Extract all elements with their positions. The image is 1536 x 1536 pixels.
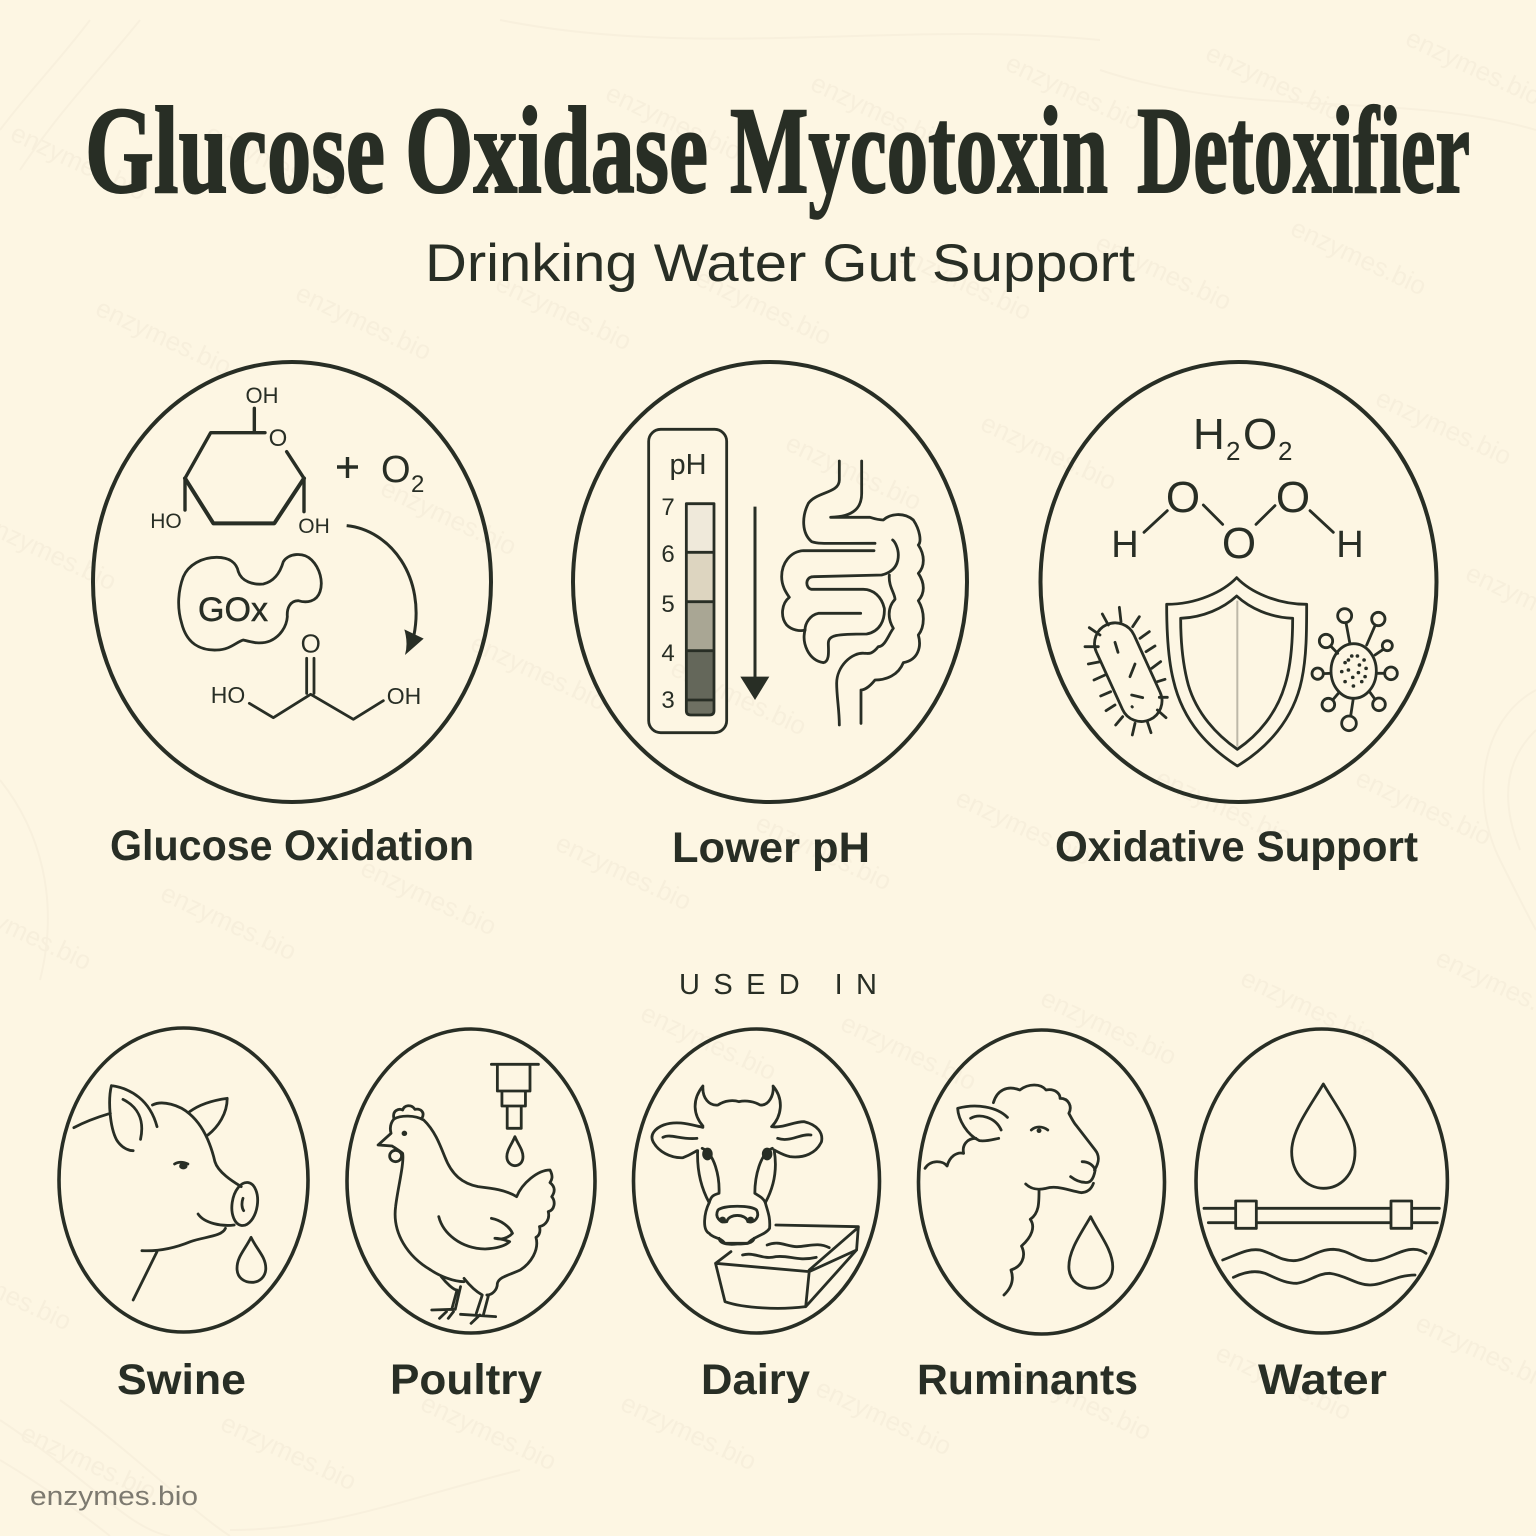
icon: intestines	[782, 461, 923, 725]
text: enzymes.bio	[491, 267, 636, 356]
icon: cow	[652, 1086, 822, 1244]
panel outline: ruminants	[918, 1030, 1164, 1334]
text: enzymes.bio	[1151, 762, 1296, 851]
panel: dairy	[634, 1029, 880, 1333]
text: enzymes.bio	[806, 67, 951, 156]
chart: pH strip: pH	[669, 449, 707, 481]
label: oxidative support: Oxidative Support	[1055, 823, 1418, 871]
icon: hen	[378, 1106, 554, 1323]
chart: pH strip	[649, 429, 727, 733]
panel outline: swine	[59, 1028, 308, 1332]
icon: water drop	[1292, 1084, 1355, 1188]
text: enzymes.bio	[691, 262, 836, 351]
icon: pig	[74, 1086, 266, 1300]
text: enzymes.bio	[466, 627, 611, 716]
label: glucose oxidation: Glucose Oxidation	[110, 822, 474, 870]
label: dairy: Dairy	[701, 1356, 810, 1404]
text: enzymes.bio	[891, 237, 1036, 326]
title	[85, 82, 1470, 219]
arrow: reaction	[347, 526, 424, 655]
diagram: peroxide molecule: O	[1166, 473, 1200, 522]
label: ruminants: Ruminants	[917, 1356, 1138, 1404]
heading: used in: USED IN	[679, 969, 877, 1001]
label: lower pH: Lower pH	[672, 824, 870, 872]
panel: poultry	[347, 1029, 595, 1333]
diagram: dihydroxyacetone	[211, 629, 421, 719]
label: glucose atoms: HO	[150, 510, 182, 533]
panel: oxidative support	[1040, 362, 1436, 802]
chart: pH strip: 3	[661, 687, 675, 714]
label: plus oxygen: 2	[411, 471, 424, 498]
icon: virus	[1312, 609, 1397, 731]
panel: ruminants	[918, 1030, 1164, 1334]
label: glucose atoms: OH	[246, 383, 278, 408]
diagram: peroxide molecule	[1111, 473, 1364, 568]
text: enzymes.bio	[1371, 382, 1516, 471]
panel outline: glucose oxidation	[93, 362, 491, 802]
diagram: peroxide molecule: H	[1336, 524, 1364, 566]
panel: glucose oxidation	[93, 362, 491, 802]
text: enzymes.bio	[201, 117, 346, 206]
chart: pH strip: 5	[661, 591, 675, 618]
text: enzymes.bio	[1286, 212, 1431, 301]
icon: shield	[1167, 578, 1307, 766]
panel outline: poultry	[347, 1029, 595, 1333]
text: enzymes.bio	[1091, 227, 1236, 316]
text: enzymes.bio	[156, 877, 301, 966]
label: glucose atoms: O	[269, 425, 287, 452]
chart: pH strip: 4	[661, 640, 675, 667]
panel: lower pH	[573, 362, 967, 802]
panel outline: lower pH	[573, 362, 967, 802]
text: enzymes.bio	[1201, 37, 1346, 126]
diagram: peroxide molecule: O	[1276, 473, 1310, 522]
formula: H2O2: O	[1243, 410, 1277, 459]
panel: water	[1196, 1029, 1447, 1333]
label: glucose atoms: OH	[298, 515, 330, 538]
text: enzymes.bio	[291, 277, 436, 366]
label: swine: Swine	[117, 1356, 246, 1404]
label: poultry: Poultry	[390, 1356, 542, 1404]
label: glucose atoms	[150, 383, 330, 538]
label: water: Water	[1258, 1356, 1387, 1404]
text: enzymes.bio	[1001, 47, 1146, 136]
text: enzymes.bio	[6, 117, 151, 206]
text: enzymes.bio	[781, 427, 926, 516]
icon: water trough	[716, 1225, 858, 1308]
diagram: peroxide molecule: H	[1111, 524, 1139, 566]
text: enzymes.bio	[951, 782, 1096, 871]
title: Oxidase	[405, 82, 708, 219]
diagram: peroxide molecule: O	[1222, 519, 1256, 568]
text: enzymes.bio	[1011, 1357, 1156, 1446]
icon: water waves	[1223, 1249, 1426, 1285]
icon: GOx enzyme blob	[179, 555, 321, 650]
formula: H2O2: 2	[1278, 436, 1292, 466]
text: enzymes.bio	[91, 292, 236, 381]
label: plus oxygen	[337, 449, 424, 498]
icon: pipe line	[1204, 1201, 1439, 1228]
icon: GOx enzyme blob: GOx	[198, 591, 268, 629]
text: enzymes.bio	[1236, 962, 1381, 1051]
text: enzymes.bio	[416, 1387, 561, 1476]
text: enzymes.bio	[811, 1372, 956, 1461]
chart: pH strip: 7	[661, 494, 675, 521]
diagram: dihydroxyacetone: HO	[211, 682, 245, 708]
icon: sheep	[925, 1085, 1113, 1295]
text: enzymes.bio	[551, 827, 696, 916]
text: enzymes.bio	[1351, 762, 1496, 851]
chart: pH strip: 6	[661, 541, 675, 568]
formula: H2O2: 2	[1226, 436, 1240, 466]
icon: bacterium	[1085, 607, 1169, 735]
title: Mycotoxin	[730, 82, 1108, 219]
diagram: dihydroxyacetone: OH	[387, 683, 421, 709]
text: enzymes.bio	[616, 1387, 761, 1476]
diagram: glucose ring	[185, 408, 304, 523]
text: enzymes.bio	[16, 1417, 161, 1506]
text: enzymes.bio	[751, 807, 896, 896]
formula: H2O2: H	[1193, 410, 1225, 459]
text: enzymes.bio	[1036, 982, 1181, 1071]
panel outline: dairy	[634, 1029, 880, 1333]
text: enzymes.bio	[1211, 1337, 1356, 1426]
icon: drinker nozzle	[491, 1064, 538, 1166]
subtitle: Drinking Water Gut Support	[425, 234, 1135, 293]
text: enzymes.bio	[636, 997, 781, 1086]
panel outline: water	[1196, 1029, 1447, 1333]
label: plus oxygen: O	[381, 449, 411, 491]
text: enzymes.bio	[216, 1407, 361, 1496]
text: enzymes.bio	[976, 407, 1121, 496]
arrow: pH decreasing	[740, 507, 769, 700]
text: enzymes.bio	[356, 852, 501, 941]
text: enzymes.bio	[666, 652, 811, 741]
text: enzymes.bio	[601, 77, 746, 166]
formula: H2O2	[1193, 410, 1292, 466]
panel: swine	[59, 1028, 308, 1332]
brand watermark: enzymes.bio	[30, 1481, 198, 1511]
text: enzymes.bio	[836, 1007, 981, 1096]
title: Glucose	[85, 82, 385, 219]
diagram: dihydroxyacetone: O	[301, 629, 321, 659]
text: enzymes.bio	[376, 472, 521, 561]
panel outline: oxidative support	[1040, 362, 1436, 802]
